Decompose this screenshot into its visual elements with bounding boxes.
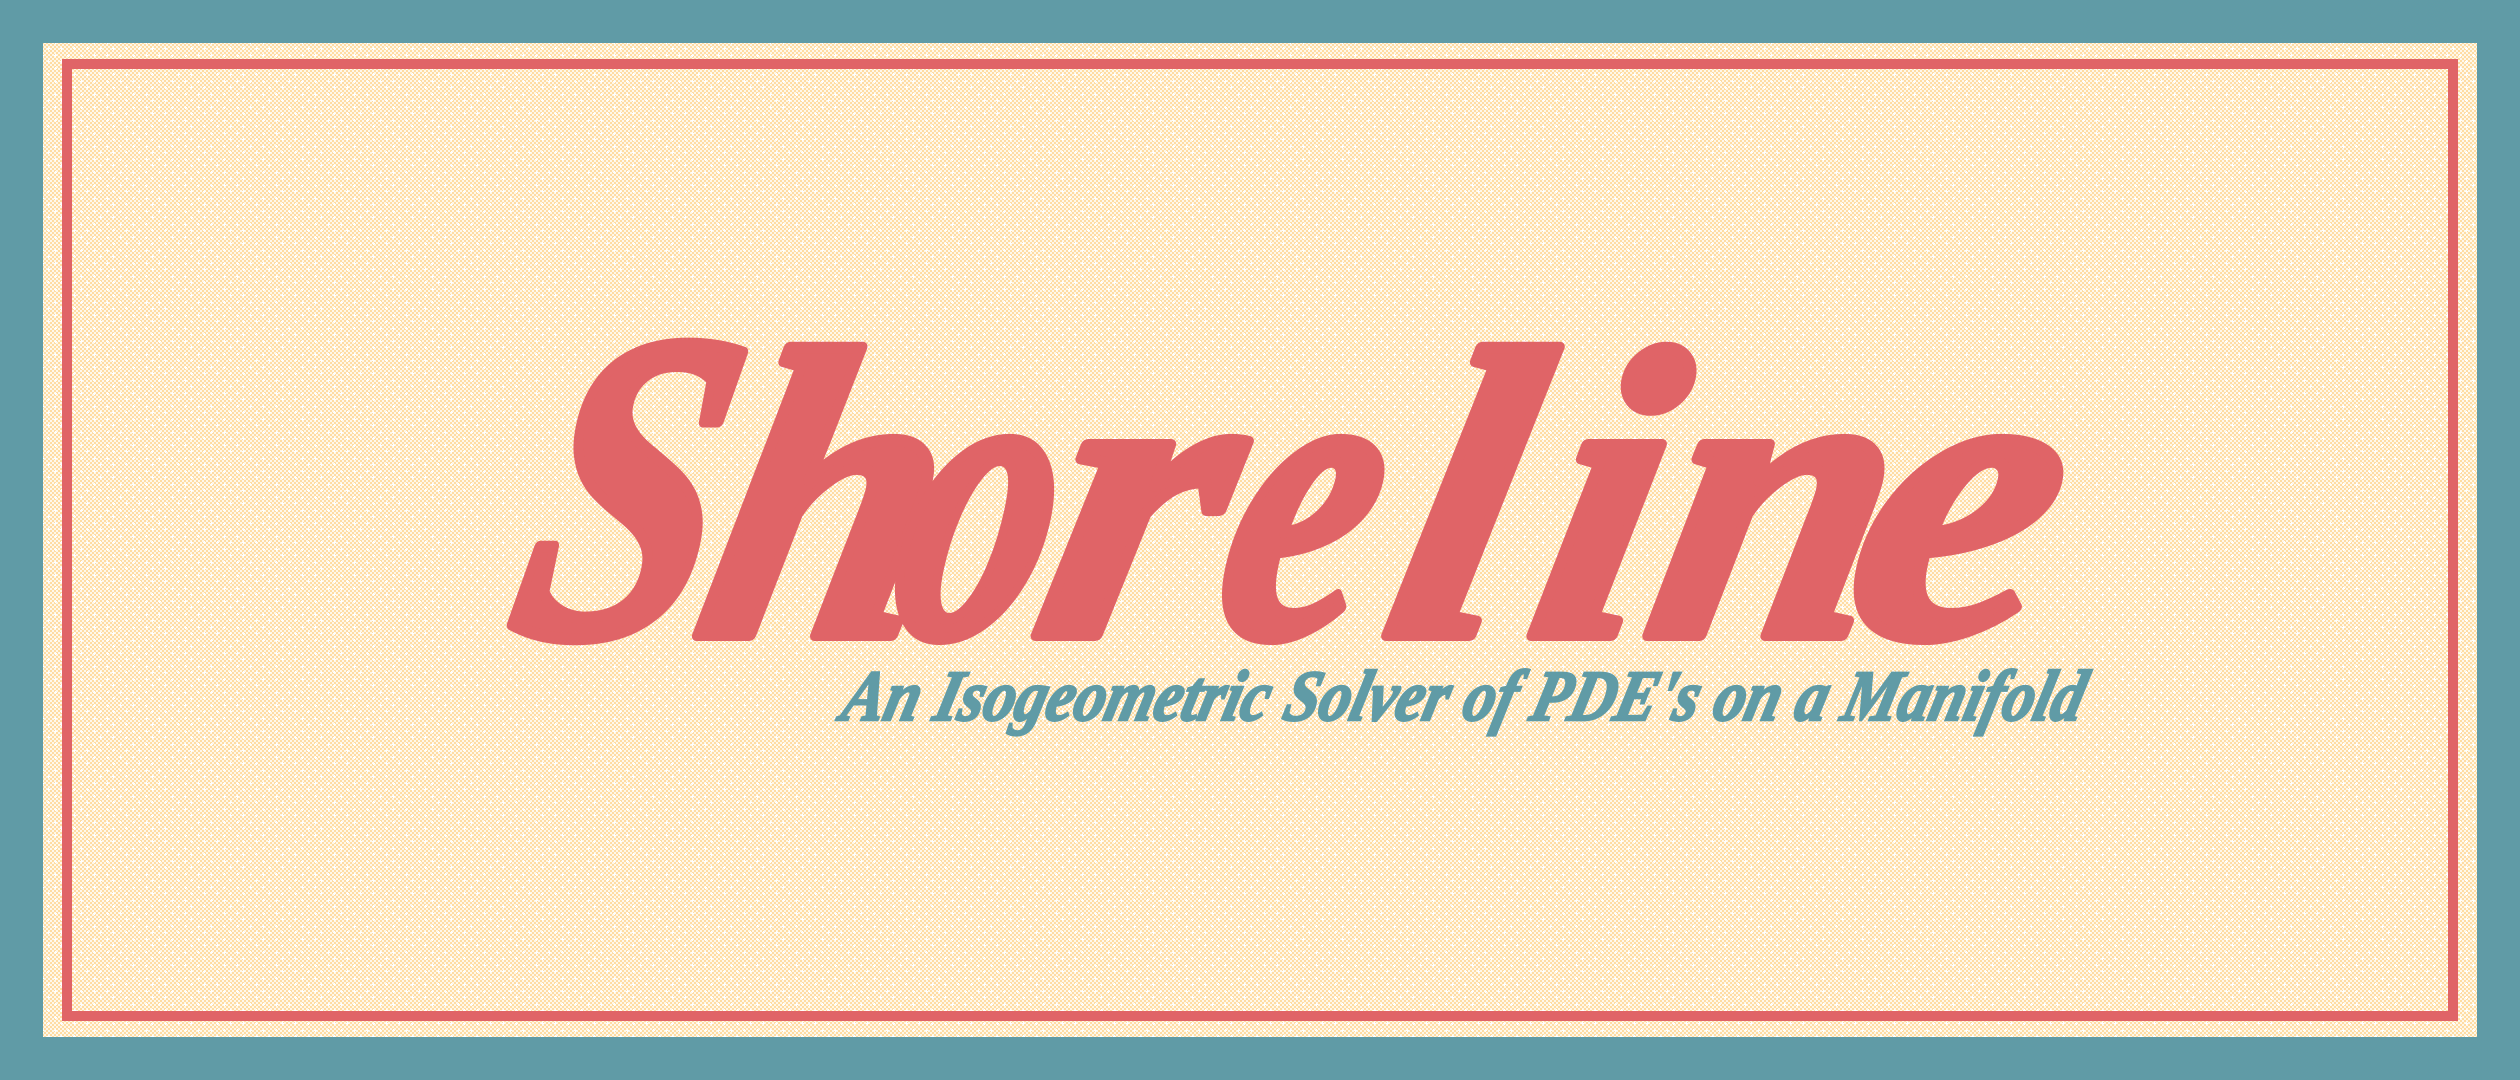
title: l [1359,266,1578,725]
title: n [1621,266,1943,725]
title: i [1503,266,1717,725]
title: S [483,244,781,731]
title: h [671,266,993,725]
title: e [1189,266,1431,725]
title: o [863,266,1110,725]
title: e [1819,266,2111,725]
subtitle: An Isogeometric Solver of PDE's on a Manifold [832,656,2096,736]
title: r [1009,266,1289,725]
